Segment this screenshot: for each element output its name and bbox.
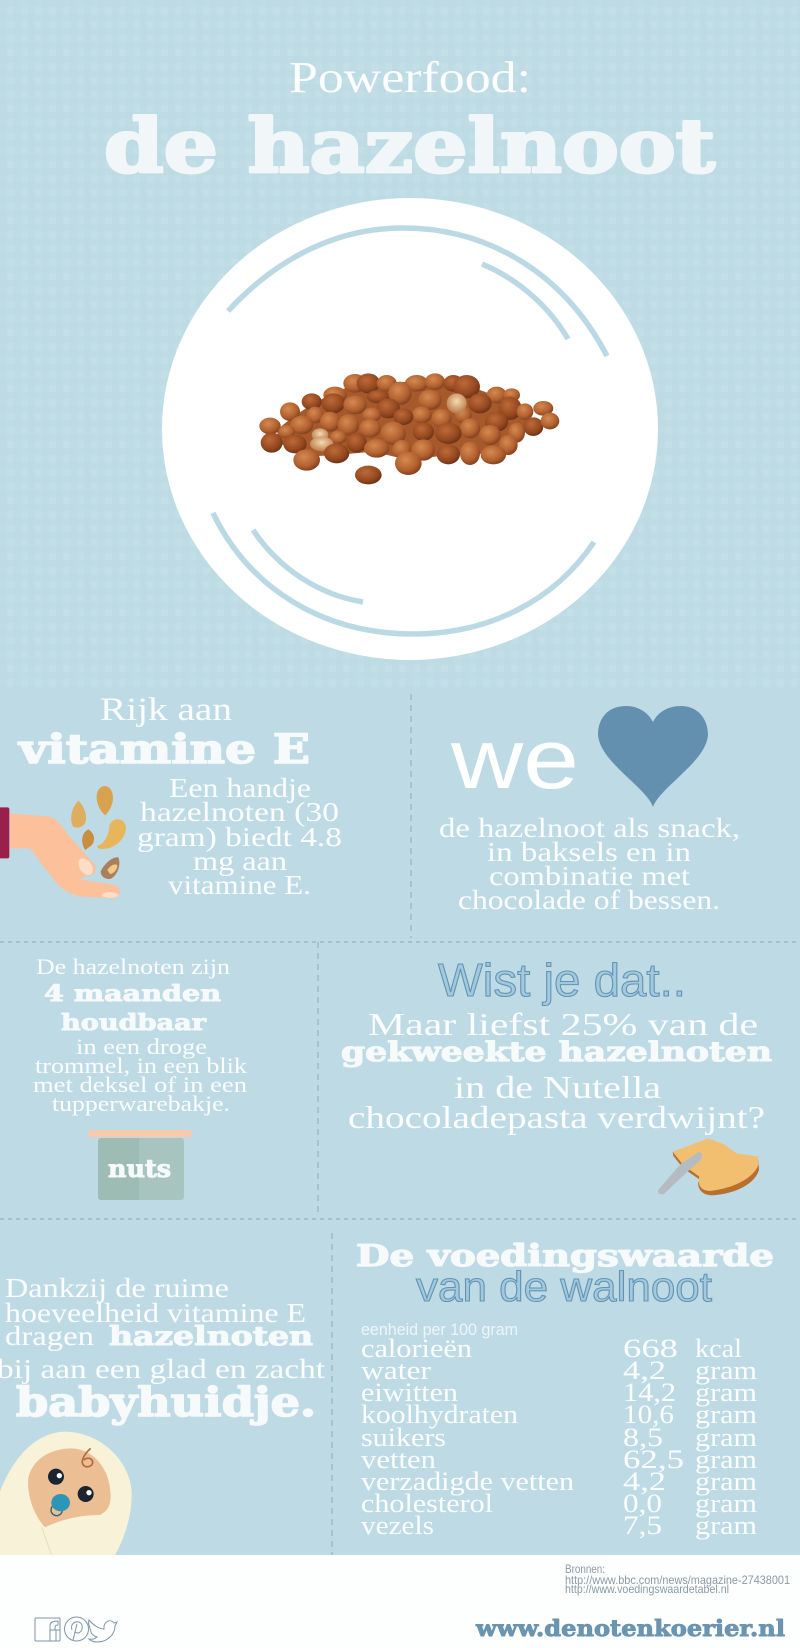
table: nutrition values: verzadigde vetten bbox=[361, 1467, 574, 1496]
text: unit note: eenheid per 100 gram bbox=[361, 1320, 518, 1339]
text: snack description: combinatie met bbox=[489, 861, 691, 891]
text: babyhuidje bbox=[0, 1273, 326, 1426]
text: 4 maanden houdbaar: tupperwarebakje. bbox=[52, 1091, 230, 1116]
text: 4 maanden houdbaar: in een droge bbox=[76, 1034, 207, 1059]
table: nutrition values: 10,6 bbox=[623, 1400, 674, 1429]
text: sources: Bronnen: bbox=[565, 1562, 605, 1576]
text: snack description bbox=[439, 813, 740, 915]
table: nutrition values: gram bbox=[695, 1467, 757, 1496]
text: we: we bbox=[450, 712, 579, 806]
table: nutrition values: gram bbox=[695, 1445, 757, 1474]
table: nutrition values: vetten bbox=[361, 1445, 436, 1474]
text: 4 maanden houdbaar: De hazelnoten zijn bbox=[36, 954, 230, 979]
text: snack description: de hazelnoot als snack, bbox=[439, 813, 740, 843]
text: babyhuidje: hazelnoten bbox=[109, 1322, 313, 1352]
panel: vitamine E bbox=[0, 692, 342, 900]
title bbox=[104, 53, 715, 190]
table: nutrition values: kcal bbox=[695, 1334, 742, 1363]
panel: houdbaar bbox=[33, 954, 247, 1200]
text: website: www.denotenkoerier.nl bbox=[475, 1616, 785, 1642]
text: nutella fact bbox=[341, 1006, 772, 1135]
text: nutella fact: chocoladepasta verdwijnt? bbox=[348, 1099, 765, 1135]
section dividers bbox=[0, 694, 800, 1555]
table: nutrition values: gram bbox=[695, 1400, 757, 1429]
heading: vitamine E bbox=[18, 692, 310, 773]
panel: we love hazelnuts bbox=[439, 706, 740, 915]
text: vitamine E body: vitamine E. bbox=[168, 870, 311, 900]
icon: toast with knife bbox=[658, 1138, 759, 1195]
heading: vitamine E: vitamine E bbox=[18, 726, 310, 773]
footer bbox=[35, 1562, 790, 1642]
heading: wist je dat: Wist je dat.. bbox=[438, 954, 686, 1006]
table: nutrition values: 0,0 bbox=[623, 1489, 662, 1518]
heading: voedingswaarde: van de walnoot bbox=[416, 1263, 712, 1310]
table: nutrition values: water bbox=[361, 1356, 431, 1385]
text: babyhuidje: Dankzij de ruime bbox=[5, 1273, 229, 1303]
text: vitamine E body bbox=[137, 773, 342, 900]
table: nutrition values: gram bbox=[695, 1489, 757, 1518]
text: 4 maanden houdbaar: trommel, in een blik bbox=[35, 1053, 247, 1078]
heading: voedingswaarde bbox=[356, 1239, 774, 1310]
table: nutrition values: 4,2 bbox=[623, 1467, 666, 1496]
table: nutrition values: koolhydraten bbox=[361, 1400, 518, 1429]
text: sources bbox=[565, 1562, 790, 1596]
text: babyhuidje: babyhuidje. bbox=[16, 1379, 316, 1426]
text: nutella fact: in de Nutella bbox=[454, 1069, 661, 1105]
table: nutrition values: suikers bbox=[361, 1423, 446, 1452]
icon: hand dropping nuts bbox=[0, 786, 126, 898]
icon: jar of nuts: nuts bbox=[108, 1154, 171, 1183]
table: nutrition values bbox=[361, 1334, 757, 1540]
table: nutrition values: gram bbox=[695, 1511, 757, 1540]
icon: jar of nuts bbox=[88, 1130, 192, 1200]
table: nutrition values: 668 bbox=[623, 1334, 678, 1363]
text: babyhuidje: dragen bbox=[5, 1321, 95, 1351]
text: vitamine E body: mg aan bbox=[193, 846, 288, 876]
text: 4 maanden houdbaar bbox=[33, 954, 247, 1116]
table: nutrition values: calorieën bbox=[361, 1334, 472, 1363]
table: nutrition values: gram bbox=[695, 1378, 757, 1407]
heading: vitamine E: Rijk aan bbox=[100, 692, 232, 728]
table: nutrition values: gram bbox=[695, 1423, 757, 1452]
table: nutrition values: vezels bbox=[361, 1511, 434, 1540]
text: 4 maanden houdbaar: houdbaar bbox=[61, 1010, 207, 1036]
heading: voedingswaarde: De voedingswaarde bbox=[356, 1239, 774, 1274]
table: nutrition values: 8,5 bbox=[623, 1423, 663, 1452]
table: nutrition values: 7,5 bbox=[623, 1511, 662, 1540]
icon: baby bbox=[0, 1432, 132, 1555]
text: babyhuidje: bij aan een glad en zacht bbox=[0, 1354, 326, 1384]
title: Powerfood: bbox=[289, 53, 531, 102]
text: 4 maanden houdbaar: 4 maanden bbox=[44, 981, 221, 1007]
text: nutella fact: gekweekte hazelnoten bbox=[341, 1037, 772, 1068]
text: 4 maanden houdbaar: met deksel of in een bbox=[33, 1072, 247, 1097]
table: nutrition values: gram bbox=[695, 1356, 757, 1385]
text: nutella fact: Maar liefst 25% van de bbox=[368, 1006, 758, 1042]
table: nutrition values: 4,2 bbox=[623, 1356, 666, 1385]
text: vitamine E body: gram) biedt 4.8 bbox=[137, 822, 342, 852]
panel: voedingswaarde bbox=[356, 1239, 774, 1540]
table: nutrition values: eiwitten bbox=[361, 1378, 458, 1407]
text: babyhuidje: hoeveelheid vitamine E bbox=[5, 1298, 306, 1328]
table: nutrition values: cholesterol bbox=[361, 1489, 493, 1518]
text: vitamine E body: hazelnoten (30 bbox=[140, 797, 339, 827]
table: nutrition values: 62,5 bbox=[623, 1445, 684, 1474]
text: vitamine E body: Een handje bbox=[169, 773, 311, 803]
text: sources: http://www.voedingswaardetabel.nl bbox=[565, 1582, 729, 1596]
panel: wist je dat bbox=[341, 954, 772, 1195]
text: snack description: chocolade of bessen. bbox=[458, 885, 720, 915]
title: de hazelnoot bbox=[104, 104, 715, 190]
icons: social media bbox=[35, 1617, 117, 1642]
icon: heart bbox=[598, 706, 708, 807]
panel: babyhuidje bbox=[0, 1273, 326, 1555]
photo: hazelnuts bbox=[259, 373, 559, 484]
plate with hazelnuts bbox=[162, 198, 658, 660]
text: snack description: in baksels en in bbox=[487, 837, 692, 867]
table: nutrition values: 14,2 bbox=[623, 1378, 676, 1407]
